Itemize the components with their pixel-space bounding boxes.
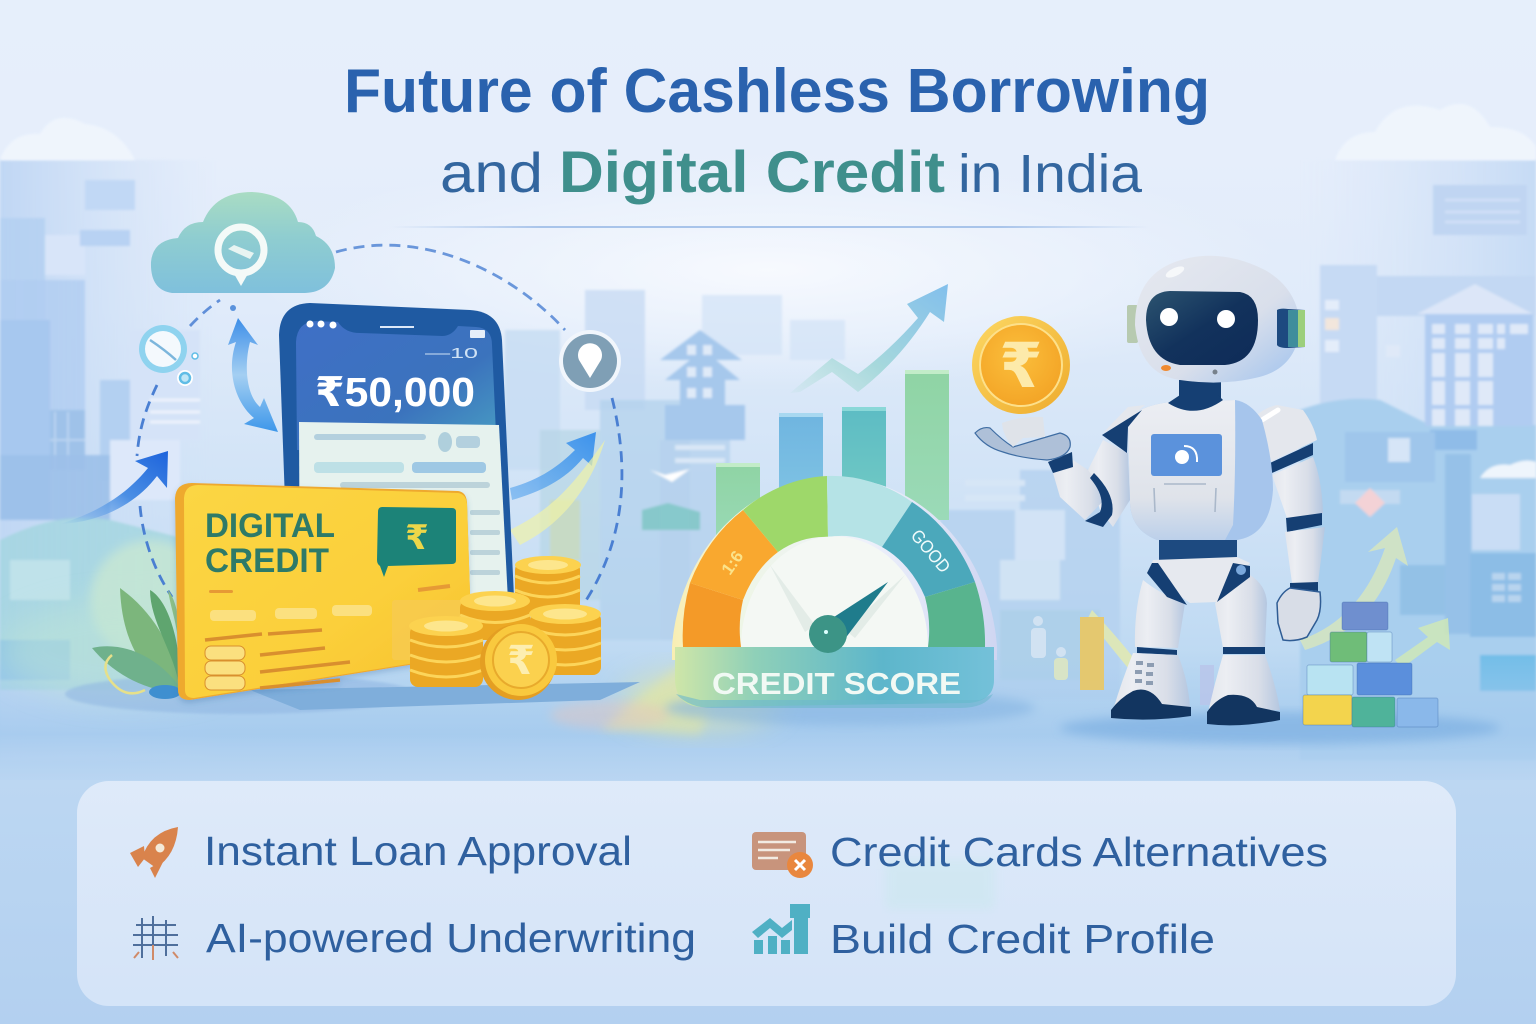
icon: crossed-out card — [752, 832, 813, 878]
skyline: left side — [0, 160, 220, 760]
bar chart with growth arrow — [716, 284, 949, 553]
arrow: curved two-way — [228, 318, 278, 432]
title: Future of Cashless Borrowing — [344, 57, 1210, 126]
phone screen header: —10 — [425, 345, 478, 362]
skyline: centre — [505, 290, 845, 640]
coin stack: middle — [460, 591, 530, 640]
gauge segments: 1:6 — [718, 547, 747, 578]
item: AI-powered Underwriting: AI-powered Underwriting — [206, 915, 696, 961]
plant — [92, 588, 181, 699]
coin: front rupee: ₹ — [507, 639, 535, 683]
icon: rocket — [130, 827, 178, 878]
credit card: DIGITAL CREDIT: DIGITAL — [205, 507, 335, 545]
phone screen header — [296, 320, 497, 456]
title: Digital Credit — [559, 140, 945, 205]
top clouds — [0, 104, 1536, 160]
icon: grid network — [133, 916, 178, 960]
title — [344, 57, 1210, 205]
title: and — [440, 141, 543, 204]
arrow: blue rising left — [60, 451, 168, 524]
coin stacks — [409, 556, 601, 700]
phone screen content — [299, 422, 510, 640]
coin: front rupee — [480, 624, 557, 700]
item: Credit Cards Alternatives: Credit Cards Alternatives — [830, 829, 1328, 875]
robot torso — [1128, 395, 1273, 540]
pagoda building — [660, 330, 745, 440]
phone screen header: ₹50,000 — [315, 369, 475, 415]
growth arrow — [790, 284, 948, 393]
item: Build Credit Profile: Build Credit Profile — [830, 916, 1215, 962]
chest screen — [1151, 434, 1222, 476]
score label band: CREDIT SCORE — [712, 666, 961, 701]
yellow streak — [510, 440, 605, 545]
icon: cloud with chat pin — [151, 192, 335, 293]
gold rupee coin — [972, 316, 1070, 414]
robot holding rupee coin — [972, 256, 1325, 725]
credit card: DIGITAL CREDIT: CREDIT — [205, 542, 329, 580]
robot legs — [1111, 575, 1280, 725]
gold rupee coin: ₹ — [999, 332, 1043, 401]
stacked blocks — [1303, 602, 1438, 727]
icon: chart with arrow — [752, 904, 810, 954]
credit score gauge — [672, 476, 997, 708]
credit card: DIGITAL CREDIT — [175, 483, 472, 700]
icon: small compass badge — [139, 325, 198, 386]
robot right arm — [1247, 405, 1325, 641]
coin stack: left — [409, 616, 483, 687]
robot left arm and hand — [975, 405, 1145, 527]
robot neck — [1179, 380, 1221, 406]
card chat badge — [377, 507, 456, 577]
score label band — [675, 647, 994, 708]
card detail lines — [205, 586, 466, 690]
card chat badge: ₹ — [405, 519, 429, 557]
phone with ₹50,000 balance — [250, 303, 640, 710]
skyline: right side — [1300, 160, 1536, 760]
gauge segments: GOOD — [907, 526, 954, 577]
orbit dashed ring — [137, 245, 622, 602]
skyline: behind robot — [940, 470, 1120, 700]
item: Build Credit Profile — [752, 904, 1215, 962]
robot head — [1127, 256, 1305, 383]
robot pelvis — [1147, 540, 1250, 605]
small arrows and people behind robot — [1031, 527, 1450, 705]
item: Instant Loan Approval: Instant Loan Approval — [204, 828, 632, 874]
icon: location pin badge — [559, 330, 621, 392]
coin stack: right — [529, 604, 601, 675]
arrow: blue rising right — [510, 432, 596, 500]
gauge segments — [683, 476, 985, 647]
gauge needle — [809, 582, 888, 653]
panel: benefits list — [77, 781, 1456, 1006]
title: in India — [958, 144, 1143, 204]
coin stack: back — [515, 556, 581, 612]
